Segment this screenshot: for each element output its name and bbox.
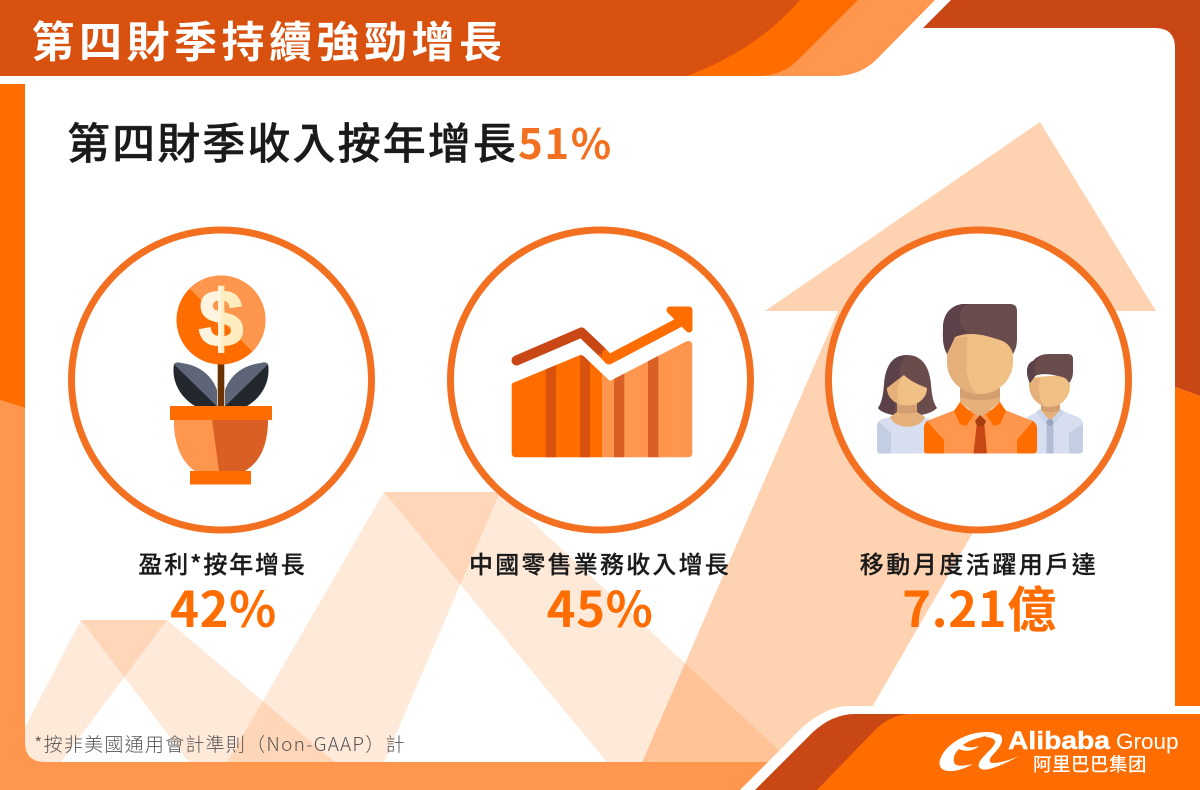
background: small tent rising band xyxy=(25,620,167,790)
icon: money plant xyxy=(170,274,272,484)
title: 第四財季持續強勁增長 xyxy=(32,8,506,70)
right strip remainder xyxy=(1175,690,1200,706)
background: middle tent rising band xyxy=(211,492,500,790)
frame: left light band and bottom strip xyxy=(0,400,768,790)
footer banner xyxy=(740,706,1200,790)
panel: China retail xyxy=(450,230,750,642)
heading: 第四財季收入按年增長51% xyxy=(67,110,613,172)
background: small tent falling band xyxy=(81,620,368,790)
label: mobile users: 移動月度活躍用戶達 xyxy=(860,545,1098,580)
icon: money plant: $ xyxy=(199,274,243,363)
logo: Alibaba Group xyxy=(939,727,1179,777)
header banner xyxy=(0,0,935,76)
circle: profit xyxy=(72,230,372,530)
frame: right dark strip xyxy=(923,0,1200,396)
panel: profit xyxy=(72,230,372,642)
logo text: Alibaba: Alibaba xyxy=(1008,727,1111,755)
circle: mobile users xyxy=(828,230,1128,530)
icon: Alibaba swirl xyxy=(939,732,1019,771)
footnote: *按非美國通用會計準則（Non-GAAP）計 xyxy=(34,730,406,757)
woman xyxy=(877,355,937,454)
icon: three people xyxy=(877,304,1083,454)
panel: mobile users xyxy=(828,230,1128,642)
value: mobile users: 7.21億 xyxy=(902,571,1057,642)
label: profit: 盈利*按年增長 xyxy=(138,545,307,580)
logo text: Group: Group xyxy=(1116,729,1179,754)
frame: left orange strip xyxy=(0,84,25,408)
man centre xyxy=(924,304,1037,454)
circle: China retail xyxy=(450,230,750,530)
frame: right orange strip xyxy=(1175,387,1200,706)
icon: rising chart xyxy=(511,310,693,460)
man right xyxy=(1027,354,1083,454)
value: profit: 42% xyxy=(170,571,277,642)
value: China retail: 45% xyxy=(547,571,653,642)
background: middle tent falling band xyxy=(384,492,822,790)
background: big growth arrow xyxy=(630,122,1156,790)
logo text: Chinese name: 阿里巴巴集团 xyxy=(1033,751,1147,777)
label: China retail: 中國零售業務收入增長 xyxy=(469,545,731,580)
